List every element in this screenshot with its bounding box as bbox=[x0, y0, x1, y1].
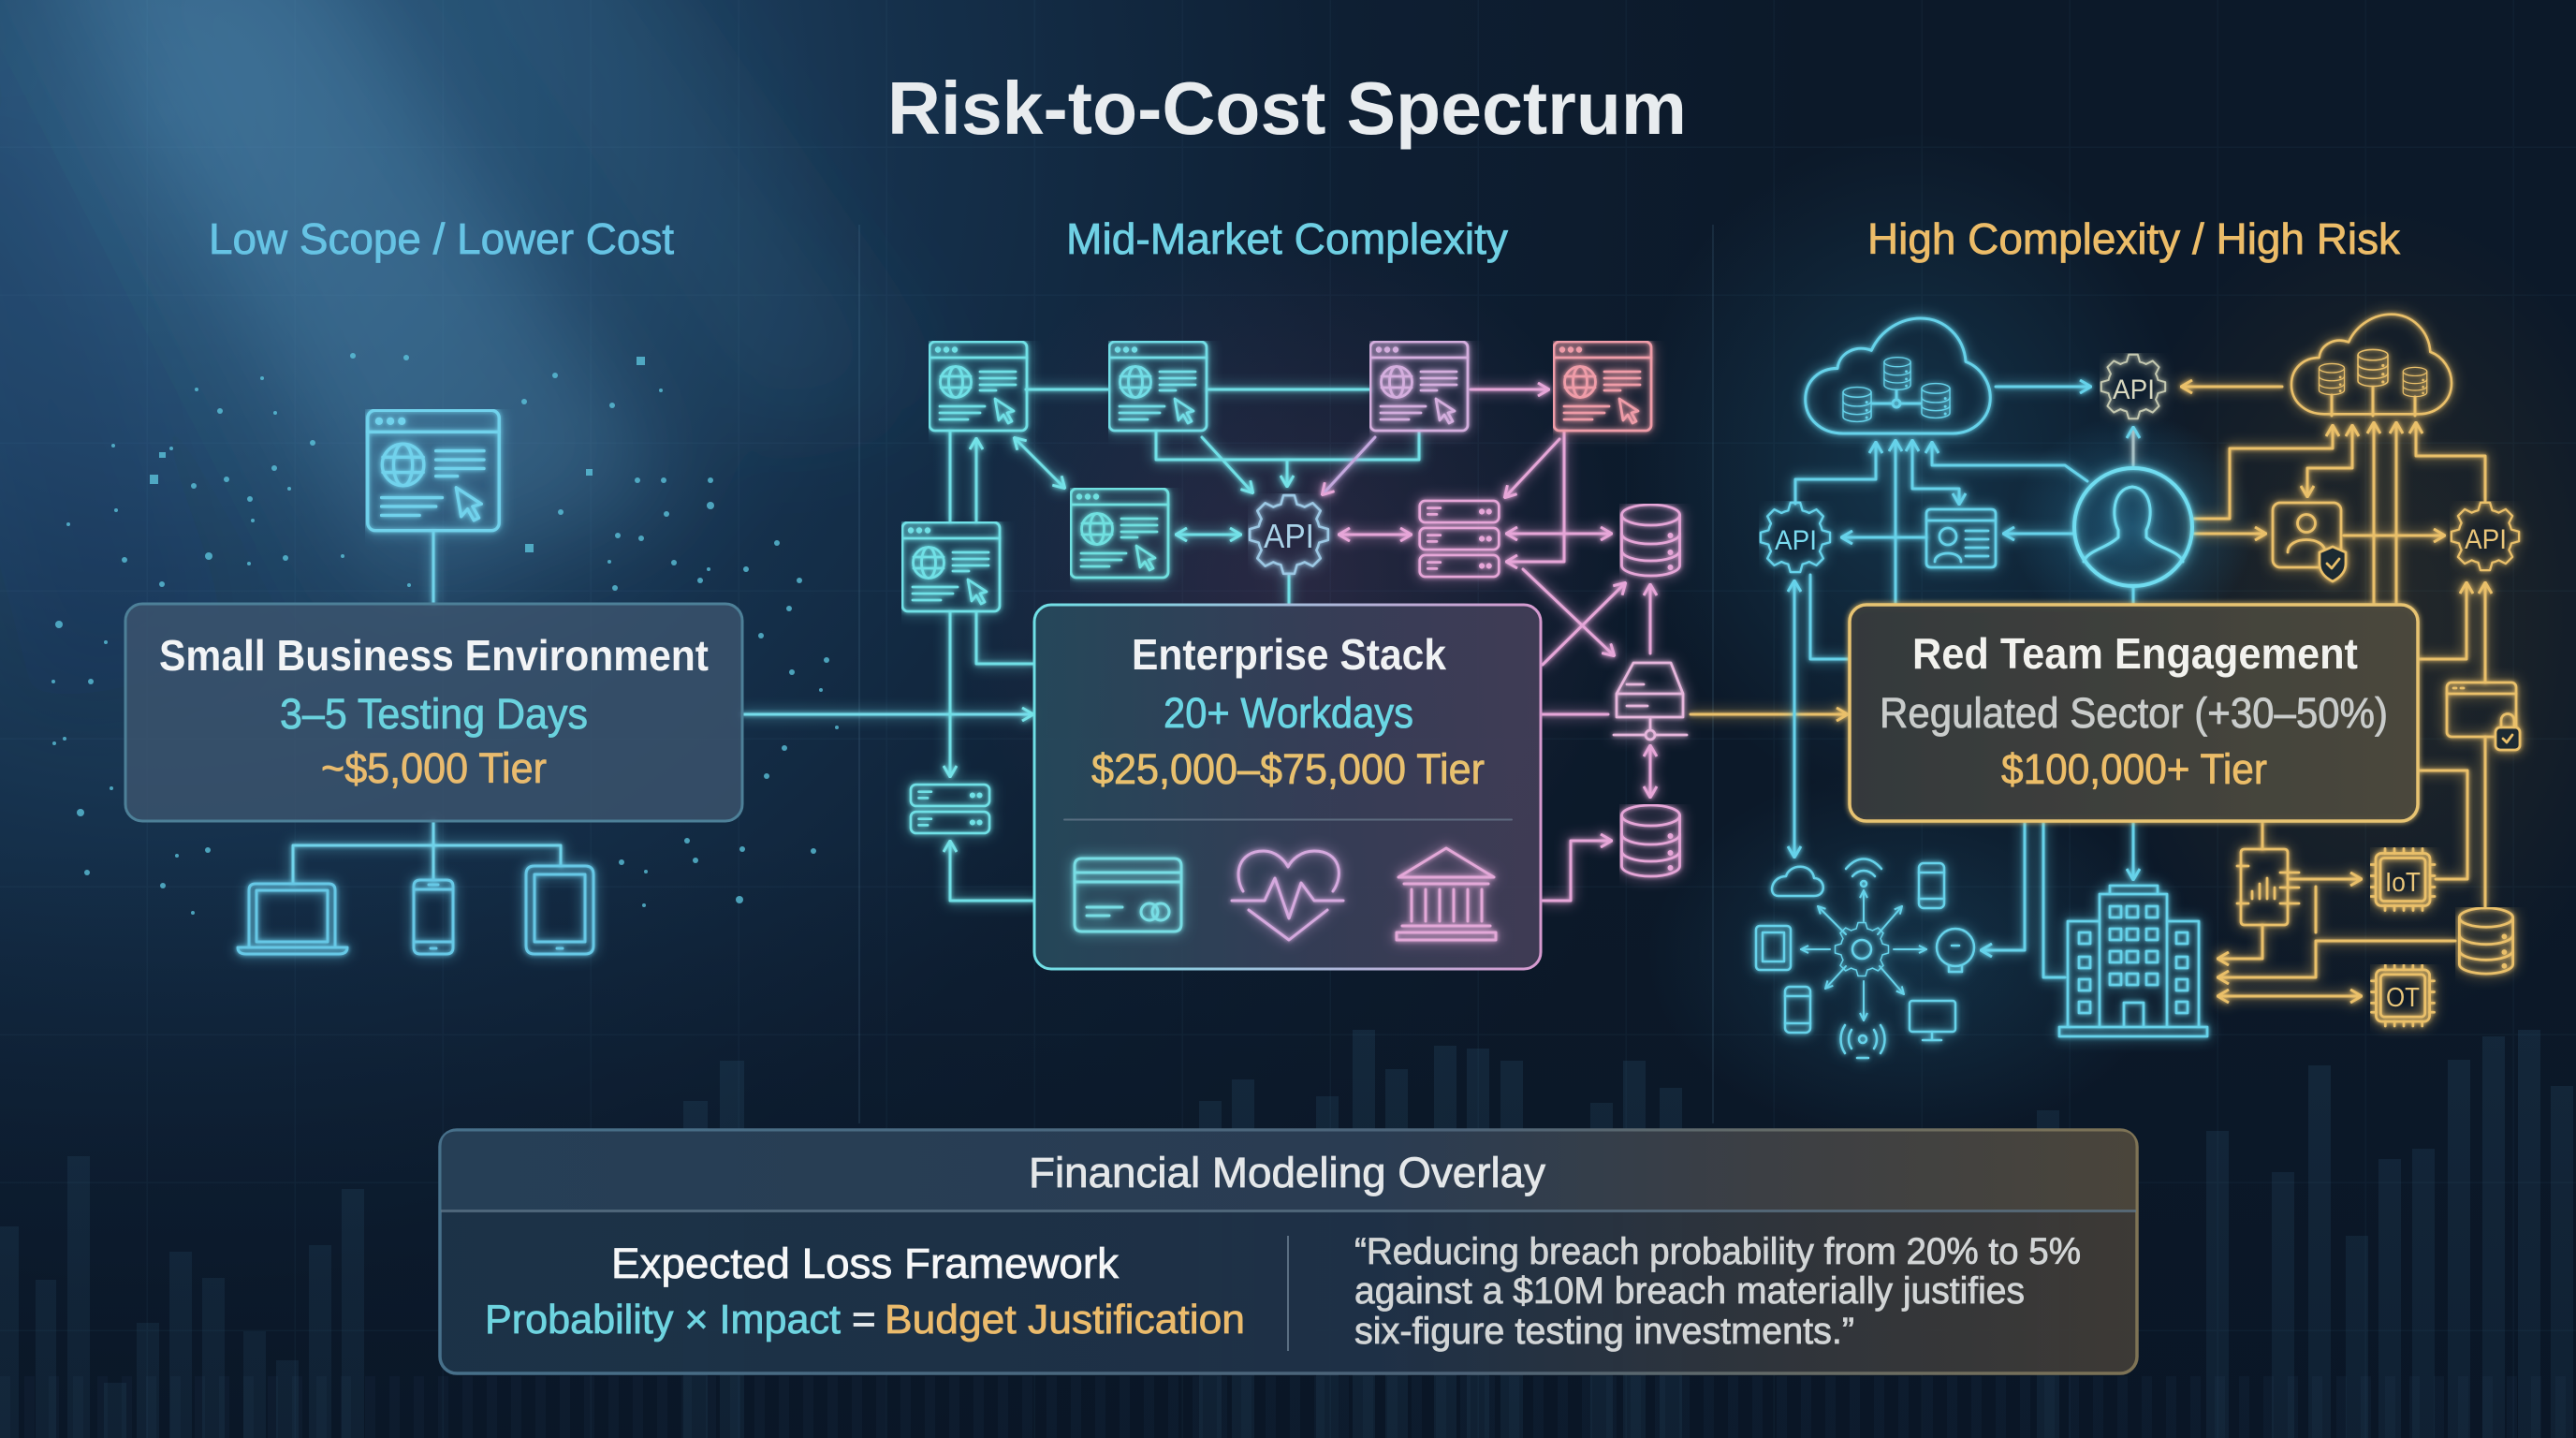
connectors: red team gold bbox=[2182, 387, 2485, 996]
icon: phone bbox=[414, 880, 453, 954]
icon: API gear left: API bbox=[1775, 525, 1817, 556]
quote: six-figure testing investments.” bbox=[1354, 1311, 1854, 1352]
icon: browser 3 bbox=[1370, 342, 1468, 431]
icon: user avatar bbox=[2074, 468, 2192, 586]
panel: small business bbox=[125, 410, 1032, 954]
icon: IoT chip bbox=[2371, 848, 2435, 910]
text: red team heading: Red Team Engagement bbox=[1912, 629, 2358, 678]
formula: = bbox=[852, 1297, 876, 1343]
icon: database bottom bbox=[1621, 805, 1679, 876]
icon: browser 1 bbox=[929, 342, 1027, 431]
icon: API gear bbox=[1250, 495, 1328, 574]
panel: financial modeling overlay bbox=[440, 1130, 2137, 1373]
icon: network node bbox=[1614, 663, 1687, 740]
icon: browser 5 bbox=[1071, 489, 1168, 578]
icon: browser with lock bbox=[2447, 682, 2520, 750]
text: small business heading: Small Business Environment bbox=[159, 631, 709, 680]
icon: API gear right bbox=[2452, 503, 2519, 570]
icon: bank bbox=[1397, 848, 1496, 940]
connectors: enterprise cyan bbox=[950, 389, 1419, 901]
card: red team engagement bbox=[1850, 605, 2418, 821]
icon: network hub bbox=[1756, 859, 1974, 1058]
panel heading: Financial Modeling Overlay bbox=[1029, 1149, 1546, 1196]
connectors: small business bbox=[293, 532, 1032, 884]
icon: API gear top bbox=[2101, 355, 2165, 418]
text: red team price tier: $100,000+ Tier bbox=[2001, 745, 2267, 793]
icon: cloud databases gold bbox=[2291, 315, 2452, 416]
formula: Budget Justification bbox=[885, 1297, 1245, 1343]
card: small business environment bbox=[125, 604, 742, 821]
icon: OT chip bbox=[2372, 965, 2434, 1026]
icon: browser window bbox=[368, 410, 499, 531]
icon: API gear top: API bbox=[2113, 374, 2155, 405]
quote bbox=[1354, 1231, 2081, 1352]
icon: tablet bbox=[526, 866, 593, 954]
icon: browser 2 bbox=[1109, 342, 1207, 431]
icon: OT chip: OT bbox=[2386, 983, 2420, 1013]
panel background bbox=[440, 1130, 2137, 1373]
icon: gold phone with chart bbox=[2237, 849, 2299, 925]
icon: office building bbox=[2059, 886, 2207, 1036]
quote: against a $10M breach materially justifies bbox=[1354, 1270, 2025, 1312]
quote: “Reducing breach probability from 20% to 5% bbox=[1354, 1231, 2081, 1272]
icon: credit card bbox=[1075, 858, 1181, 932]
text: testing days: 3–5 Testing Days bbox=[280, 690, 588, 738]
panel: red team bbox=[1756, 315, 2520, 1058]
icon: API gear: API bbox=[1264, 517, 1314, 555]
text: workdays: 20+ Workdays bbox=[1164, 689, 1413, 737]
text: enterprise price tier: $25,000–$75,000 Tier bbox=[1091, 745, 1485, 793]
column heading: low scope: Low Scope / Lower Cost bbox=[209, 214, 674, 263]
icon: database top bbox=[1621, 505, 1679, 576]
icon: left server bbox=[911, 785, 989, 833]
icon: profile card bbox=[1926, 509, 1996, 567]
panel header band bbox=[442, 1131, 2136, 1211]
formula: Probability × Impact bbox=[485, 1297, 841, 1343]
connectors: red team blue bbox=[1794, 387, 2133, 977]
avatar halo bbox=[2012, 415, 2255, 639]
icon: person with shield bbox=[2273, 503, 2346, 581]
text: regulated sector: Regulated Sector (+30–50%) bbox=[1880, 689, 2388, 737]
icon: laptop bbox=[238, 884, 347, 954]
icon: IoT chip: IoT bbox=[2385, 868, 2421, 898]
column heading: mid-market: Mid-Market Complexity bbox=[1066, 214, 1508, 263]
connectors: enterprise pink bbox=[1323, 389, 1650, 901]
icon: API gear left bbox=[1761, 503, 1830, 572]
card: enterprise stack bbox=[1034, 605, 1541, 969]
icon: browser 4 bbox=[1554, 342, 1651, 431]
icon: gold database bbox=[2459, 908, 2513, 974]
particles bbox=[51, 353, 839, 915]
column heading: high complexity: High Complexity / High Risk bbox=[1867, 214, 2401, 263]
icon: cloud databases blue bbox=[1806, 318, 1990, 433]
panel: enterprise stack bbox=[902, 342, 1847, 969]
icon: server stack bbox=[1420, 501, 1499, 577]
text: price tier: ~$5,000 Tier bbox=[321, 744, 547, 792]
expected loss framework heading: Expected Loss Framework bbox=[611, 1240, 1119, 1287]
icon: API gear right: API bbox=[2465, 524, 2507, 555]
connector: enterprise to red team bbox=[1690, 713, 1847, 715]
title: Risk-to-Cost Spectrum bbox=[887, 66, 1687, 150]
text: enterprise heading: Enterprise Stack bbox=[1132, 630, 1446, 679]
icon: browser 6 bbox=[902, 522, 1000, 611]
formula bbox=[485, 1297, 1245, 1343]
icon: heart pulse bbox=[1232, 851, 1343, 940]
